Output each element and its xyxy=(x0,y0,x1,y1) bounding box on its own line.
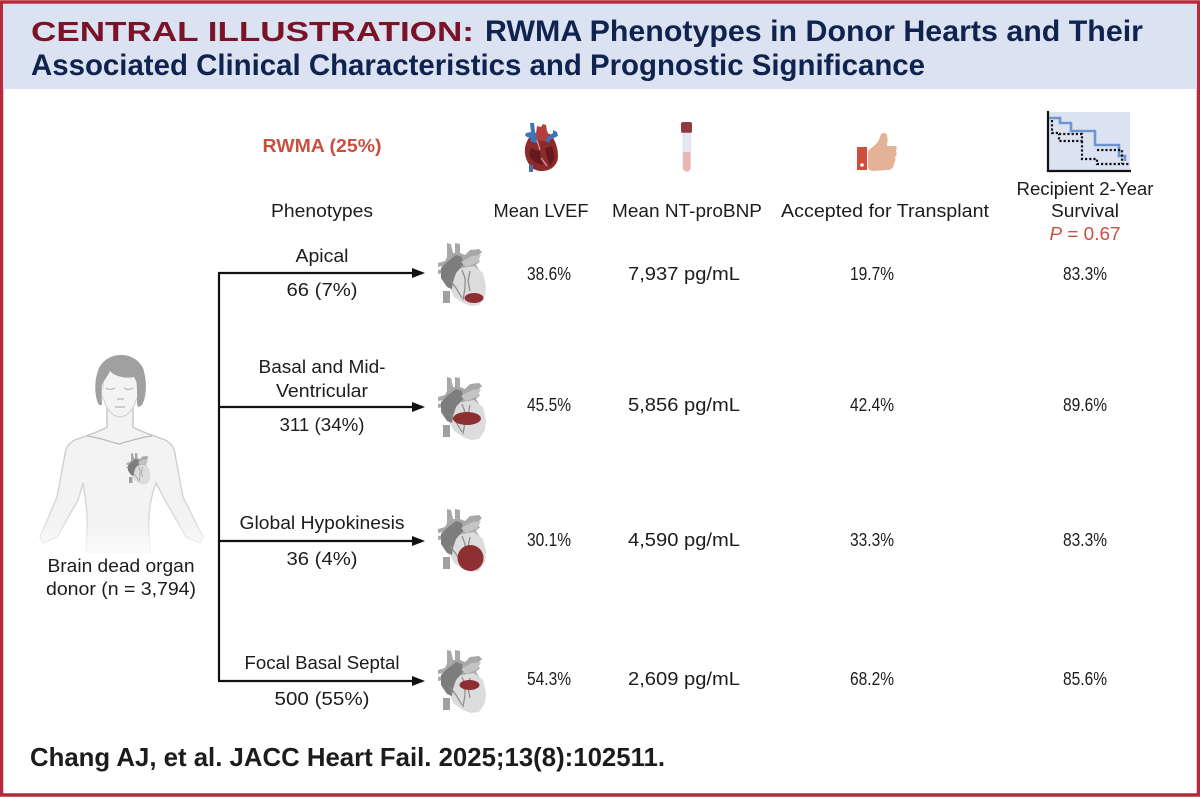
row: apical xyxy=(286,243,1107,306)
row: global hypokinesis: 36 (4%) xyxy=(286,549,358,569)
donor label: Brain dead organ xyxy=(48,556,194,576)
icon: heart xyxy=(525,123,558,172)
title xyxy=(31,15,1143,82)
icon: thumbs up xyxy=(857,133,897,171)
row: basal and mid-ventricular: 45.5% xyxy=(527,394,571,415)
row: basal and mid-ventricular: 89.6% xyxy=(1063,394,1107,415)
icon: survival curve xyxy=(1048,111,1131,171)
branching arrows xyxy=(218,268,425,686)
icon: blood tube xyxy=(681,122,692,172)
row: apical: 66 (7%) xyxy=(286,280,358,300)
row: basal and mid-ventricular: 311 (34%) xyxy=(280,415,364,435)
row: apical: 7,937 pg/mL xyxy=(628,264,740,284)
row: focal basal septal: 500 (55%) xyxy=(274,689,370,709)
row: basal and mid-ventricular: Basal and Mid- xyxy=(258,357,386,377)
row: focal basal septal: 85.6% xyxy=(1063,668,1107,689)
row: global hypokinesis: Global Hypokinesis xyxy=(240,513,404,533)
row: focal basal septal: 68.2% xyxy=(850,668,894,689)
title: CENTRAL ILLUSTRATION: xyxy=(31,16,474,47)
RWMA percentage label: RWMA (25%) xyxy=(262,136,382,156)
column headings: P = 0.67 xyxy=(1050,224,1120,244)
icon: global heart xyxy=(438,509,486,572)
row: focal basal septal: Focal Basal Septal xyxy=(244,653,400,673)
row: global hypokinesis: 83.3% xyxy=(1063,529,1107,550)
column headings: Accepted for Transplant xyxy=(781,201,989,221)
header band xyxy=(3,4,1197,89)
row: focal basal septal xyxy=(244,650,1107,713)
donor label xyxy=(46,556,196,599)
row: global hypokinesis: 4,590 pg/mL xyxy=(628,530,740,550)
citation: Chang AJ, et al. JACC Heart Fail. 2025;13(8):102511. xyxy=(30,742,665,772)
row: basal and mid-ventricular: 5,856 pg/mL xyxy=(628,395,740,415)
icon: apical heart xyxy=(438,243,486,306)
row: basal and mid-ventricular: 42.4% xyxy=(850,394,894,415)
icon: focal basal septal heart xyxy=(438,650,486,713)
row: global hypokinesis: 33.3% xyxy=(850,529,894,550)
donor figure xyxy=(40,355,203,599)
row: focal basal septal: 2,609 pg/mL xyxy=(628,669,740,689)
column headings: Phenotypes xyxy=(271,201,373,221)
row: focal basal septal: 54.3% xyxy=(527,668,571,689)
column headings: Mean NT-proBNP xyxy=(612,201,762,221)
row: global hypokinesis xyxy=(240,509,1107,572)
donor label: donor (n = 3,794) xyxy=(46,579,196,599)
row: apical: Apical xyxy=(296,246,348,266)
title: RWMA Phenotypes in Donor Hearts and Their xyxy=(485,15,1143,48)
row: basal and mid-ventricular xyxy=(258,357,1107,440)
row: apical: 19.7% xyxy=(850,263,894,284)
title: Associated Clinical Characteristics and Prognostic Significance xyxy=(31,49,925,82)
row: apical: 83.3% xyxy=(1063,263,1107,284)
column headings xyxy=(271,179,1154,244)
icon: basal and mid-ventricular heart xyxy=(438,377,486,440)
row: apical: 38.6% xyxy=(527,263,571,284)
row: global hypokinesis: 30.1% xyxy=(527,529,571,550)
row: basal and mid-ventricular: Ventricular xyxy=(276,381,368,401)
column headings: Recipient 2-Year xyxy=(1016,179,1154,199)
column headings: Mean LVEF xyxy=(494,201,588,221)
column headings: Survival xyxy=(1051,201,1119,221)
